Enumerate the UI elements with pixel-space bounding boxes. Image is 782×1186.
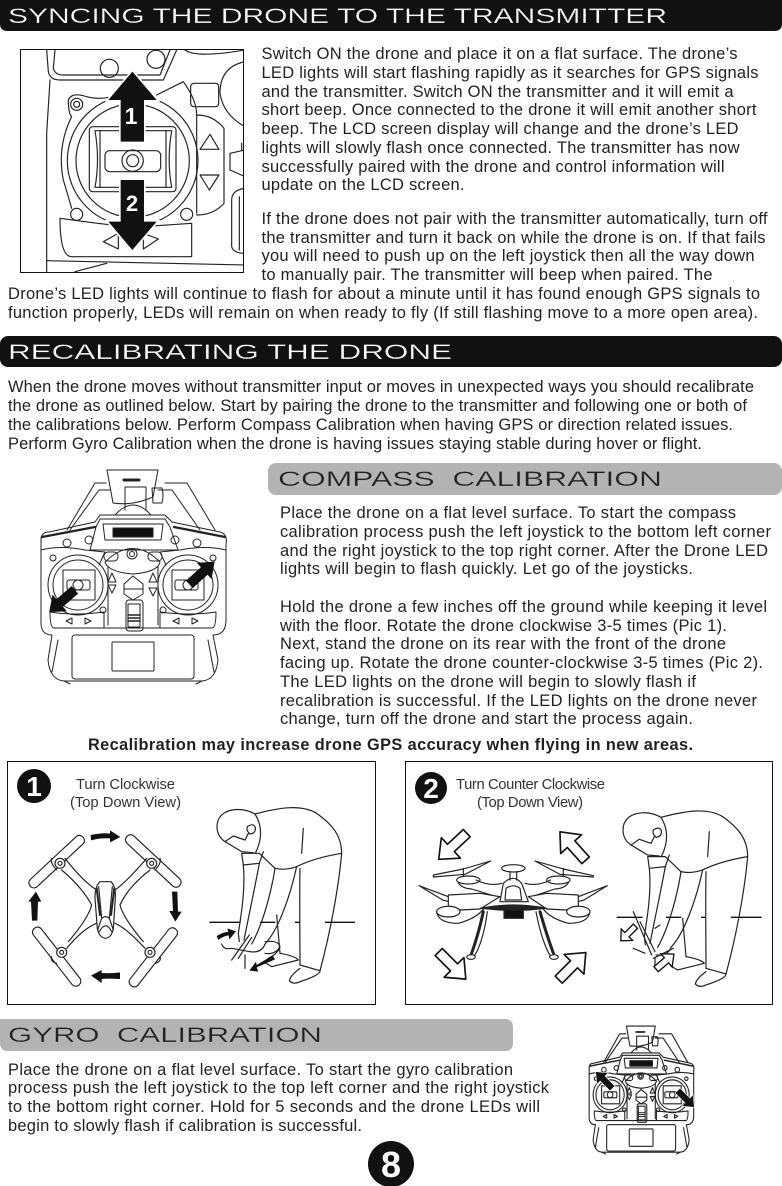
label: turn clockwise — [70, 777, 181, 811]
text block: recalibration intro: the calibrations below. Perform Compass Calibration when having GPS or direction related issues. — [8, 416, 733, 434]
text block: recalibration intro: When the drone moves without transmitter input or moves in unexpected ways you should recalibrate — [8, 378, 754, 396]
header: compass calibration: COMPASS CALIBRATION — [278, 468, 662, 491]
label: turn clockwise: (Top Down View) — [70, 795, 181, 811]
panel: turn clockwise — [8, 762, 376, 1004]
header: compass calibration — [268, 463, 782, 495]
page number: 8 — [381, 1144, 401, 1185]
header: recalibrating — [0, 336, 782, 367]
label: turn counter clockwise — [456, 777, 605, 811]
illustration: left joystick with up and down arrows: 2 — [126, 191, 138, 216]
text block: compass calibration: Place the drone on a flat level surface. To start the compass — [280, 504, 736, 522]
text block: compass calibration: facing up. Rotate the drone counter-clockwise 3-5 times (Pic 2). — [280, 654, 763, 672]
text block: syncing steps — [8, 45, 768, 322]
text block: recalibration intro: Perform Gyro Calibration when the drone is having issues staying stable during hover or flight. — [8, 435, 702, 453]
illustration: transmitter with compass joystick arrows — [41, 470, 226, 684]
panel: turn counter clockwise — [406, 762, 772, 1004]
text block: syncing steps: Drone’s LED lights will continue to flash for about a minute until it has found enough GPS signals to — [8, 285, 760, 303]
header: gyro calibration: GYRO CALIBRATION — [8, 1024, 322, 1047]
text block: syncing steps: the transmitter and turn it back on while the drone is on. If that fails — [262, 229, 766, 247]
illustration: person rotating drone flat — [209, 808, 355, 983]
text block: compass calibration: Hold the drone a few inches off the ground while keeping it level — [280, 598, 767, 616]
header: syncing: SYNCING THE DRONE TO THE TRANSMITTER — [8, 5, 667, 28]
text block: syncing steps: function properly, LEDs will remain on when ready to fly (If still flashing move to a more open area). — [8, 304, 758, 322]
label: turn clockwise: Turn Clockwise — [76, 777, 175, 793]
badge: 1: 1 — [26, 771, 42, 802]
text block: gyro calibration: begin to slowly flash if calibration is successful. — [8, 1117, 362, 1135]
text block: compass calibration: and the right joystick to the top right corner. After the Drone LED — [280, 542, 768, 560]
text block: gyro calibration: to the bottom right corner. Hold for 5 seconds and the drone LEDs will — [8, 1098, 540, 1116]
badge: 2 — [415, 772, 447, 804]
badge: 1 — [17, 769, 51, 803]
text block: syncing steps: lights will slowly flash once connected. The transmitter has now — [262, 139, 740, 157]
text block: compass calibration: Next, stand the drone on its rear with the front of the drone — [280, 635, 726, 653]
text block: compass calibration: lights will begin to flash quickly. Let go of the joysticks. — [280, 560, 693, 578]
illustration: transmitter with gyro joystick arrows — [589, 1026, 700, 1154]
text block: syncing steps: If the drone does not pair with the transmitter automatically, turn off — [262, 210, 768, 228]
illustration: left joystick with up and down arrows: 1 — [125, 103, 138, 129]
badge: 2: 2 — [423, 773, 439, 804]
illustration: drone top view with clockwise arrows — [27, 830, 183, 989]
label: turn counter clockwise: Turn Counter Clockwise — [456, 777, 605, 793]
header: gyro calibration — [0, 1019, 513, 1051]
text block: gyro calibration: Place the drone on a flat level surface. To start the gyro calibration — [8, 1061, 513, 1079]
header: syncing — [0, 0, 782, 31]
header: recalibrating: RECALIBRATING THE DRONE — [8, 341, 452, 364]
page number — [368, 1141, 414, 1186]
text block: recalibration intro — [8, 378, 754, 453]
text block: compass calibration — [279, 504, 772, 728]
text block: syncing steps: successfully paired with the drone and control information will — [262, 158, 724, 176]
text block: syncing steps: beep. The LCD screen display will change and the drone’s LED — [262, 120, 739, 138]
text block: syncing steps: short beep. Once connected to the drone it will emit another short — [262, 101, 757, 119]
text block: gyro calibration: process push the left joystick to the top left corner and the right joystick — [8, 1079, 550, 1097]
text block: syncing steps: to manually pair. The transmitter will beep when paired. The — [262, 266, 712, 284]
illustration: person rotating drone upright — [615, 811, 762, 986]
text block: compass calibration: calibration process push the left joystick to the bottom left corner — [280, 523, 772, 541]
text block: compass calibration: with the floor. Rotate the drone clockwise 3-5 times (Pic 1). — [279, 617, 727, 635]
text block: syncing steps: you will need to push up on the left joystick then all the way down — [262, 247, 754, 265]
note: recalibration accuracy: Recalibration may increase drone GPS accuracy when flying in new areas. — [88, 736, 693, 754]
text block: compass calibration: recalibration is successful. If the LED lights on the drone never — [280, 692, 758, 710]
illustration: left joystick with up and down arrows — [20, 50, 245, 273]
text block: gyro calibration — [8, 1061, 550, 1135]
text block: syncing steps: update on the LCD screen. — [262, 176, 464, 194]
text block: compass calibration: change, turn off the drone and start the process again. — [280, 710, 693, 728]
text block: syncing steps: LED lights will start flashing rapidly as it searches for GPS signals — [262, 64, 758, 82]
text block: recalibration intro: the drone as outlined below. Start by pairing the drone to the transmitter and following one or both of — [8, 397, 747, 415]
illustration: drone side view with rotation arrows — [419, 822, 607, 990]
text block: syncing steps: and the transmitter. Switch ON the transmitter and it will emit a — [262, 83, 734, 101]
text block: syncing steps: Switch ON the drone and place it on a flat surface. The drone’s — [262, 45, 738, 63]
text block: compass calibration: The LED lights on the drone will begin to slowly flash if — [280, 673, 696, 691]
label: turn counter clockwise: (Top Down View) — [477, 795, 583, 811]
